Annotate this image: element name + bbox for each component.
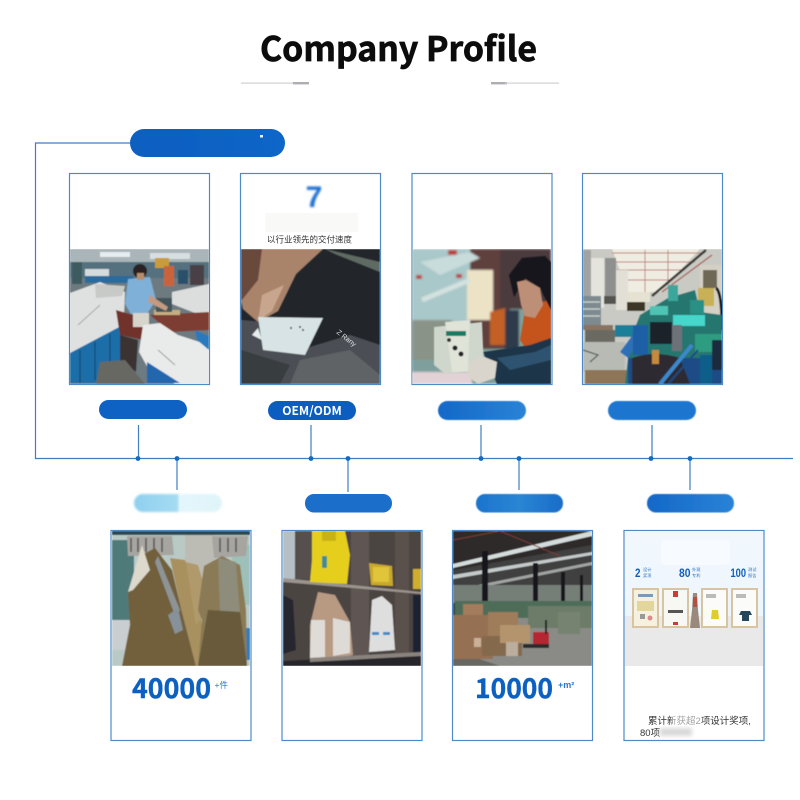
photo: hand placing label on jacket xyxy=(241,249,380,384)
panel: top card 4 injection workshop xyxy=(582,174,722,384)
panel: top card 3 sewing worker xyxy=(412,174,552,384)
award stat: design patents: 专利 xyxy=(692,572,700,579)
award backdrop xyxy=(625,531,763,667)
card caption: 以行业领先的交付速度 xyxy=(267,234,352,244)
stat: 10000 square metres: 10000 xyxy=(475,667,553,706)
timeline dots xyxy=(136,456,692,461)
timeline connector lines xyxy=(36,143,793,492)
panel: bottom card 2 showroom xyxy=(282,530,422,740)
stat: 40000 pieces: +件 xyxy=(214,680,228,690)
photo: workshop with teal machines xyxy=(583,249,722,384)
photo: khaki coats on hangers xyxy=(112,531,250,666)
photo: warehouse with stacked cartons xyxy=(453,531,592,666)
pill: bottom card 3 label xyxy=(476,494,563,512)
award stat: design awards: 2 xyxy=(635,566,641,580)
certificate caption: 80项 xyxy=(640,728,661,739)
panel: bottom card 3 warehouse xyxy=(452,530,592,740)
title underline decoration xyxy=(241,82,559,84)
bottom label pills xyxy=(134,494,734,512)
photo: jackets in display cabinet xyxy=(283,531,421,666)
certificate caption xyxy=(640,714,751,739)
section heading pill xyxy=(130,129,285,157)
award stat: test reports: 报告 xyxy=(748,572,756,579)
pill: card 4 label xyxy=(608,401,696,420)
pill: bottom card 4 label xyxy=(647,494,734,512)
panel: bottom card 4 certificates xyxy=(624,530,764,740)
award stat: test reports: 测试 xyxy=(748,566,757,573)
award stat: test reports: 100 xyxy=(730,566,746,580)
stat: 40000 pieces: 40000 xyxy=(132,667,211,706)
pill: bottom card 2 label xyxy=(305,494,392,512)
pill: OEM/ODM label xyxy=(268,401,356,420)
blurred stat number: 7 xyxy=(306,181,322,214)
award stat: design awards: 奖项 xyxy=(643,572,652,579)
stat: 10000 square metres: +m² xyxy=(558,680,574,690)
award stat: design patents: 外观 xyxy=(692,566,701,573)
award stat: design patents: 80 xyxy=(679,566,691,580)
photo: workers among white bags xyxy=(70,249,209,384)
faded stat caption block xyxy=(265,213,358,232)
certificate caption: 累计新获超2项设计奖项, xyxy=(648,715,751,727)
top label pills xyxy=(99,400,696,420)
award stat: design awards: 设计 xyxy=(643,566,651,573)
pill: bottom card 1 label xyxy=(134,494,222,512)
title: Company Profile xyxy=(260,22,537,71)
award stat: design awards xyxy=(635,566,652,580)
pill: OEM/ODM label: OEM/ODM xyxy=(282,402,342,419)
panel: top card 2 delivery speed xyxy=(240,174,380,384)
pill: card 3 label xyxy=(438,401,526,420)
framed certificates and trophy xyxy=(632,588,758,628)
brand mark on jacket: Z Rany xyxy=(335,329,357,349)
award stat: design patents xyxy=(679,566,701,580)
pill: card 1 label xyxy=(99,400,187,419)
panel: top card 1 factory floor xyxy=(70,174,210,384)
photo: worker at sewing machine xyxy=(412,249,551,384)
panel: bottom card 1 output xyxy=(111,530,251,740)
